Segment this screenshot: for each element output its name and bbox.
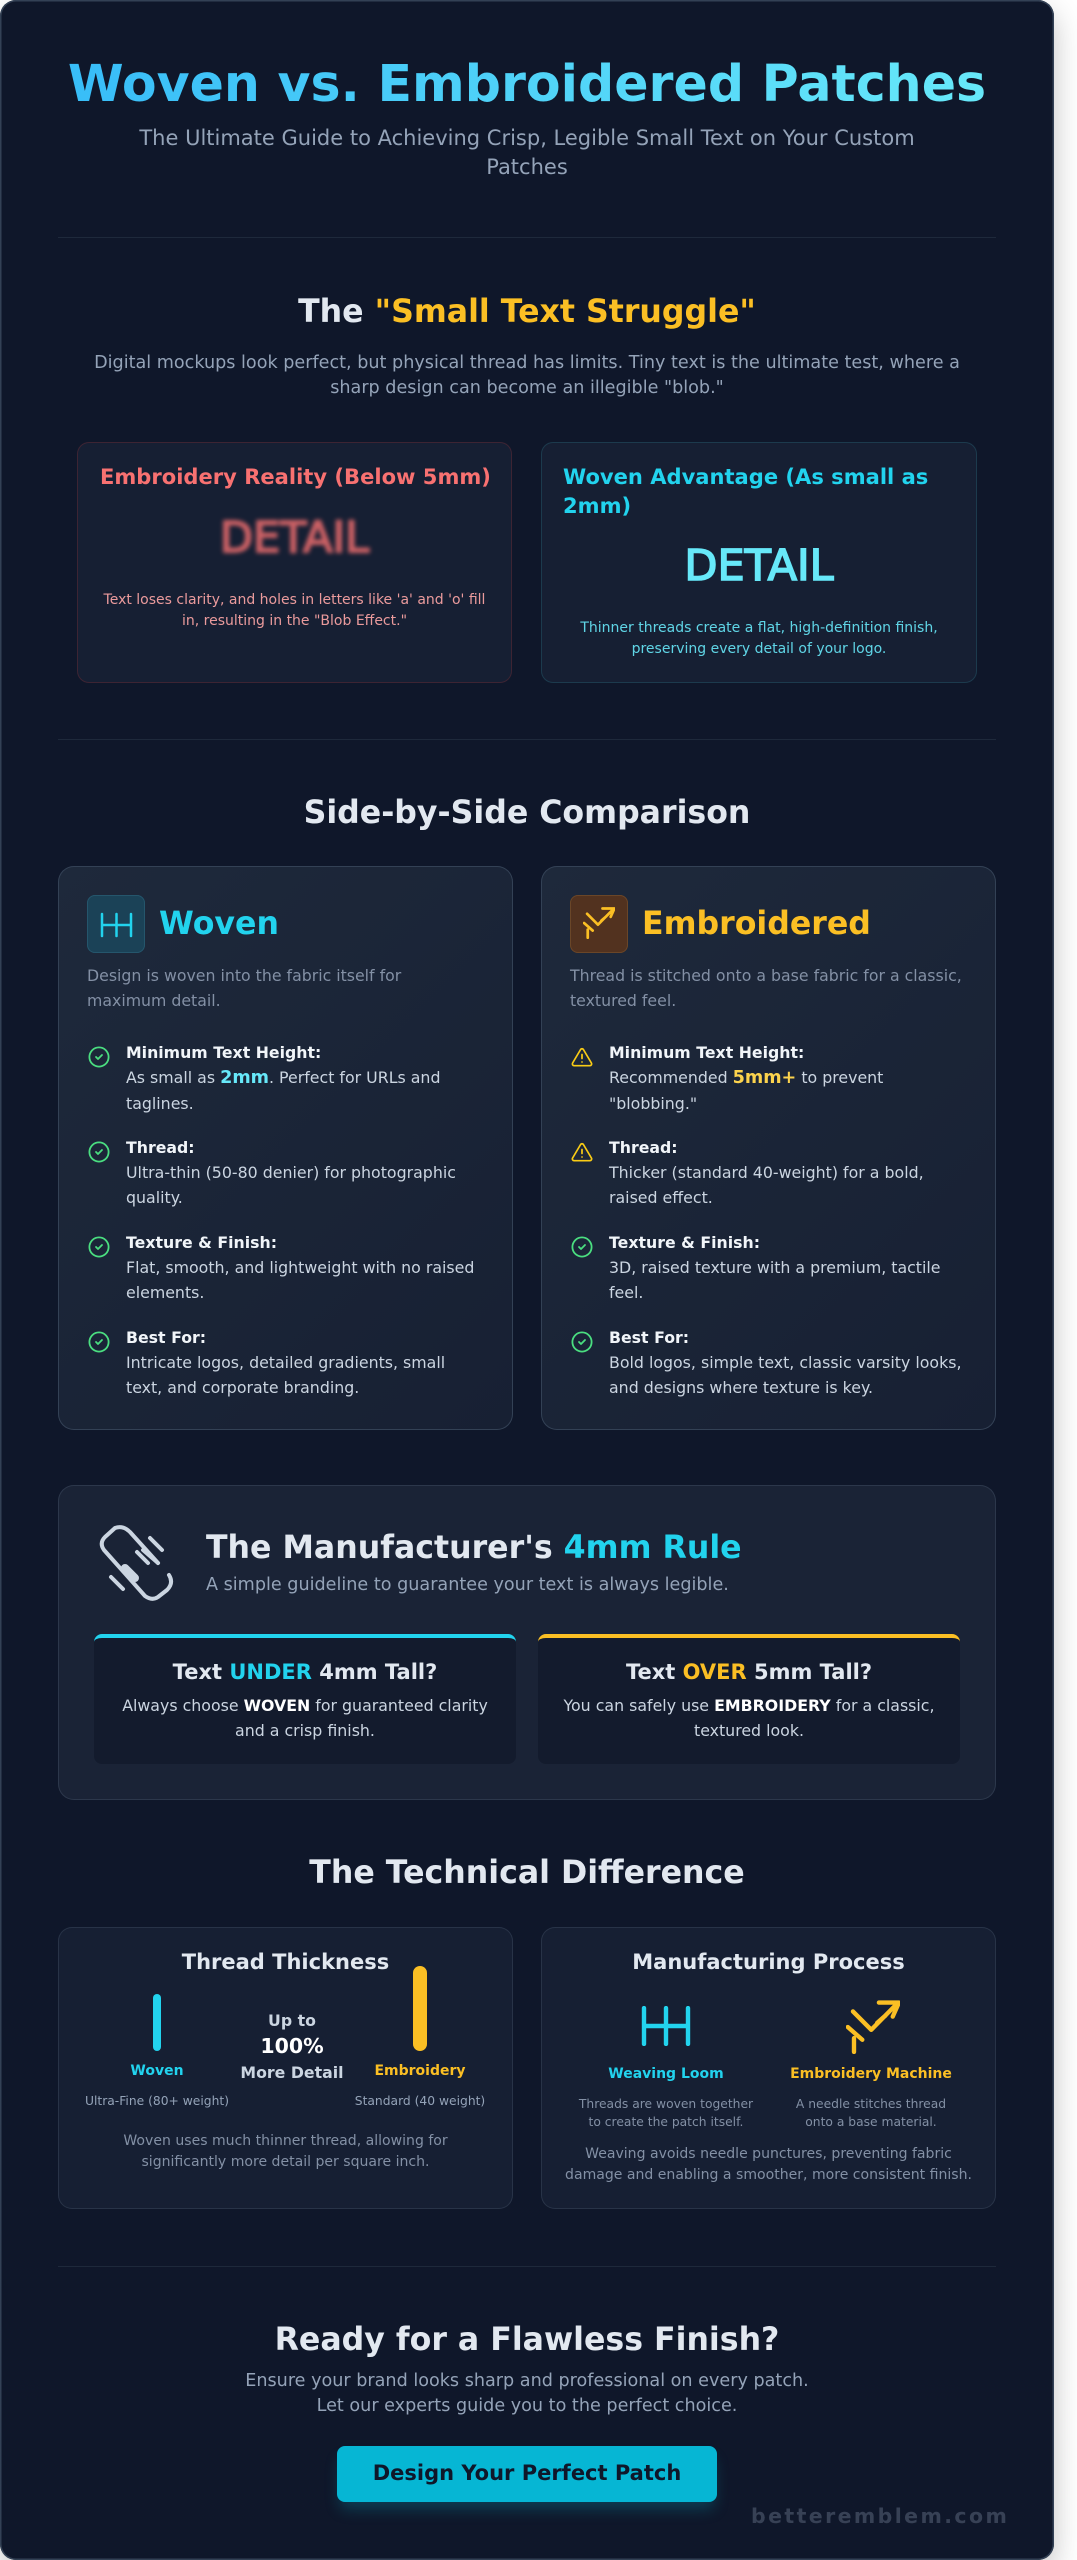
panel: woven advantage: [541, 442, 977, 683]
call to action text: [245, 2371, 809, 2416]
icon: embroidery machine: [846, 2000, 900, 2054]
panel description: preserving every detail of your logo.: [632, 641, 886, 657]
crisp sample text: DETAIL: [684, 541, 834, 591]
text: weaving loom: Threads are woven together: [579, 2097, 753, 2111]
intro paragraph: Digital mockups look perfect, but physical thread has limits. Tiny text is the ultimate test, where a: [94, 353, 960, 373]
panel: thread thickness: [58, 1927, 513, 2209]
panel heading: Embroidery Reality (Below 5mm): [100, 464, 491, 489]
panel description: Text loses clarity, and holes in letters like 'a' and 'o' fill: [104, 592, 485, 608]
heading: small text struggle: The "Small Text Struggle": [298, 294, 756, 330]
item: texture and finish: [126, 1233, 474, 1302]
panel description: [565, 2146, 972, 2183]
icon: stitches: [570, 895, 628, 953]
stat lead-in: Up to: [268, 2011, 316, 2030]
icon: warning: [572, 1142, 592, 1162]
label: weaving loom: Weaving Loom: [608, 2066, 724, 2082]
panel heading: Manufacturing Process: [632, 1950, 905, 1974]
item: texture and finish: Texture & Finish:: [126, 1233, 277, 1252]
icon: check: [572, 1236, 592, 1258]
button: [337, 2446, 717, 2502]
subtitle: The Ultimate Guide to Achieving Crisp, Legible Small Text on Your Custom: [139, 126, 915, 150]
call to action text: Let our experts guide you to the perfect choice.: [317, 2396, 737, 2416]
intro paragraph: [94, 353, 960, 398]
item: minimum text height: taglines.: [126, 1094, 194, 1113]
panel: embroidery reality: [77, 442, 512, 683]
item: best for: Bold logos, simple text, classic varsity looks,: [609, 1353, 961, 1372]
item: best for: [609, 1328, 961, 1397]
panel description: [580, 620, 938, 657]
heading: call to action: Ready for a Flawless Finish?: [275, 2322, 779, 2358]
panel description: [87, 966, 402, 1010]
label: embroidery machine: Embroidery Machine: [790, 2066, 952, 2082]
panel description: in, resulting in the "Blob Effect.": [182, 613, 407, 629]
panel title: Embroidered: [642, 906, 871, 942]
icon: check: [88, 1046, 110, 1068]
item: minimum text height: Minimum Text Height:: [609, 1043, 804, 1062]
watermark: betteremblem.com: [751, 2504, 1009, 2528]
blurred sample text: DETAIL: [220, 513, 369, 563]
panel subheading: A simple guideline to guarantee your text is always legible.: [206, 1575, 729, 1595]
panel description: damage and enabling a smoother, more consistent finish.: [565, 2167, 972, 2183]
item: texture and finish: elements.: [126, 1283, 204, 1302]
woven weight: Ultra-Fine (80+ weight): [85, 2094, 229, 2108]
icon: check: [88, 1236, 110, 1258]
panel description: Design is woven into the fabric itself for: [87, 966, 401, 985]
item: minimum text height: [126, 1043, 440, 1113]
item: texture and finish: Texture & Finish:: [609, 1233, 760, 1252]
panel heading: Thread Thickness: [182, 1950, 389, 1974]
title: Woven vs. Embroidered Patches: [68, 54, 986, 113]
panel description: [570, 966, 962, 1010]
item: minimum text height: As small as 2mm. Perfect for URLs and: [126, 1068, 440, 1088]
item: best for: Intricate logos, detailed gradients, small: [126, 1353, 445, 1372]
icon: loom: [87, 895, 145, 953]
woven label: Woven: [130, 2063, 184, 2079]
item: thread: Ultra-thin (50-80 denier) for photographic: [126, 1163, 456, 1182]
subtitle: [139, 126, 915, 179]
panel heading: [563, 464, 928, 518]
panel description: [123, 2133, 448, 2170]
panel description: significantly more detail per square inch.: [141, 2154, 430, 2170]
subtitle: Patches: [486, 155, 568, 179]
panel description: maximum detail.: [87, 991, 221, 1010]
item: thread: Thread:: [126, 1138, 195, 1157]
panel: manufacturing process: [541, 1927, 996, 2209]
item: minimum text height: "blobbing.": [609, 1094, 697, 1113]
thread bar: embroidery: [413, 1966, 427, 2051]
icon: check: [88, 1332, 110, 1352]
item: thread: quality.: [126, 1188, 183, 1207]
item: best for: Best For:: [126, 1328, 206, 1347]
thread bar: woven: [153, 1994, 161, 2051]
panel description: Thread is stitched onto a base fabric for a classic,: [570, 966, 962, 985]
icon: check: [88, 1142, 110, 1162]
panel description: Woven uses much thinner thread, allowing for: [123, 2133, 448, 2149]
intro paragraph: sharp design can become an illegible "blob.": [330, 378, 724, 398]
icon: weaving loom: [642, 2006, 690, 2046]
item: minimum text height: Recommended 5mm+ to prevent: [609, 1068, 883, 1088]
item: best for: [126, 1328, 445, 1397]
heading: comparison: Side-by-Side Comparison: [304, 795, 750, 831]
panel heading: 2mm): [563, 492, 631, 518]
item: thread: [608, 1138, 924, 1207]
item: minimum text height: [609, 1043, 883, 1113]
item: texture and finish: [609, 1233, 940, 1302]
heading: technical difference: The Technical Difference: [309, 1855, 745, 1891]
panel: 4mm rule: [58, 1485, 996, 1800]
stat caption: More Detail: [240, 2063, 344, 2082]
panel heading: Woven Advantage (As small as: [563, 464, 928, 489]
panel description: Weaving avoids needle punctures, preventing fabric: [585, 2146, 952, 2162]
icon: warning: [572, 1048, 592, 1066]
item: texture and finish: feel.: [609, 1283, 643, 1302]
panel: embroidered: [541, 866, 996, 1430]
text: weaving loom: to create the patch itself.: [589, 2115, 743, 2129]
box text: You can safely use EMBROIDERY for a classic,: [563, 1696, 935, 1715]
box heading: Text OVER 5mm Tall?: [626, 1660, 872, 1684]
item: thread: [126, 1138, 456, 1207]
item: thread: raised effect.: [609, 1188, 713, 1207]
embroidery weight: Standard (40 weight): [355, 2094, 485, 2108]
text: embroidery machine: A needle stitches thread: [796, 2097, 946, 2111]
stat value: 100%: [260, 2034, 324, 2058]
item: texture and finish: Flat, smooth, and lightweight with no raised: [126, 1258, 474, 1277]
icon: link: [100, 1525, 174, 1601]
call to action text: Ensure your brand looks sharp and professional on every patch.: [245, 2371, 809, 2391]
item: thread: Thicker (standard 40-weight) for a bold,: [609, 1163, 924, 1182]
rule box: over 5mm: [538, 1634, 960, 1764]
box text: textured look.: [694, 1721, 804, 1740]
rule box: under 4mm: [94, 1634, 516, 1764]
box text: [563, 1696, 935, 1740]
item: thread: Thread:: [609, 1138, 678, 1157]
panel description: [103, 592, 485, 629]
text: weaving loom: [578, 2097, 754, 2129]
item: minimum text height: Minimum Text Height:: [126, 1043, 321, 1062]
item: best for: and designs where texture is key.: [609, 1378, 873, 1397]
box heading: Text UNDER 4mm Tall?: [173, 1660, 437, 1684]
stat: more detail: [240, 2011, 344, 2082]
item: best for: Best For:: [609, 1328, 689, 1347]
panel description: textured feel.: [570, 991, 676, 1010]
icon: check: [572, 1332, 592, 1352]
embroidery label: Embroidery: [374, 2063, 466, 2079]
text: embroidery machine: [796, 2097, 946, 2129]
panel title: Woven: [159, 906, 279, 942]
panel heading: The Manufacturer's 4mm Rule: [206, 1530, 742, 1566]
item: texture and finish: 3D, raised texture with a premium, tactile: [609, 1258, 940, 1277]
box text: Always choose WOVEN for guaranteed clarity: [122, 1696, 488, 1715]
text: embroidery machine: onto a base material.: [805, 2115, 937, 2129]
button: Design Your Perfect Patch: [373, 2461, 681, 2485]
panel description: Thinner threads create a flat, high-definition finish,: [580, 620, 938, 636]
box text: and a crisp finish.: [235, 1721, 375, 1740]
box text: [122, 1696, 488, 1740]
panel: woven: [58, 866, 513, 1430]
item: best for: text, and corporate branding.: [126, 1378, 359, 1397]
